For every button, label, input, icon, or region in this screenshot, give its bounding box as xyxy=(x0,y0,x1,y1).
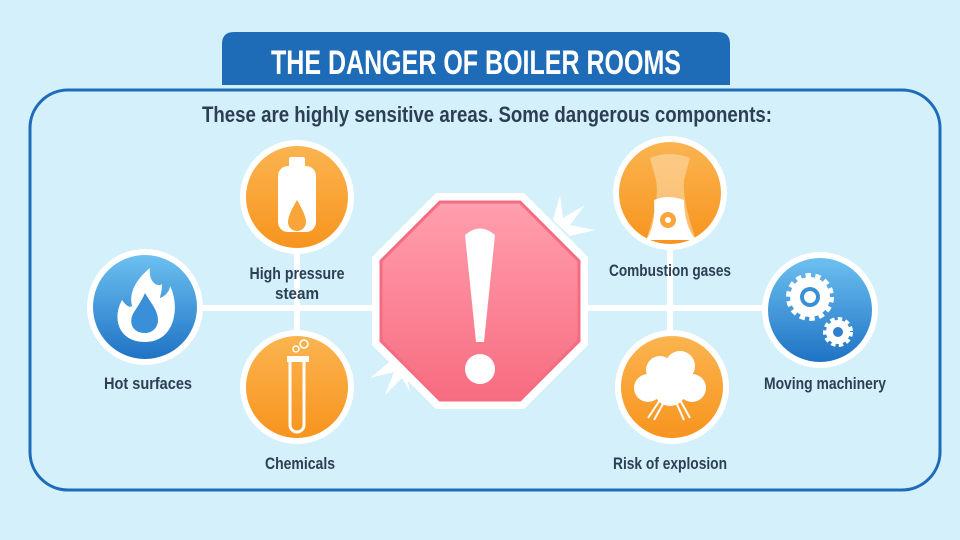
subtitle: These are highly sensitive areas. Some dangerous components: xyxy=(202,102,772,127)
icon: high pressure steam xyxy=(240,140,354,303)
icon: moving machinery: Moving machinery xyxy=(764,374,886,393)
title xyxy=(222,32,730,85)
icon: moving machinery xyxy=(762,252,886,393)
icon: combustion gases: Combustion gases xyxy=(609,261,731,280)
icon: chemicals: Chemicals xyxy=(265,454,335,473)
icon: warning octagon xyxy=(370,193,595,409)
title: THE DANGER OF BOILER ROOMS xyxy=(271,44,681,82)
panel: main frame xyxy=(30,90,940,490)
icon: chemicals xyxy=(240,330,354,473)
icon: high pressure steam: High pressure xyxy=(250,264,344,283)
connectors xyxy=(145,230,820,350)
icon: risk of explosion xyxy=(613,330,729,473)
icon: risk of explosion: Risk of explosion xyxy=(613,454,727,473)
icon: combustion gases xyxy=(609,136,731,280)
icon: high pressure steam: steam xyxy=(275,284,319,303)
icon: hot surfaces: Hot surfaces xyxy=(104,374,192,393)
icon: hot surfaces xyxy=(87,249,203,393)
